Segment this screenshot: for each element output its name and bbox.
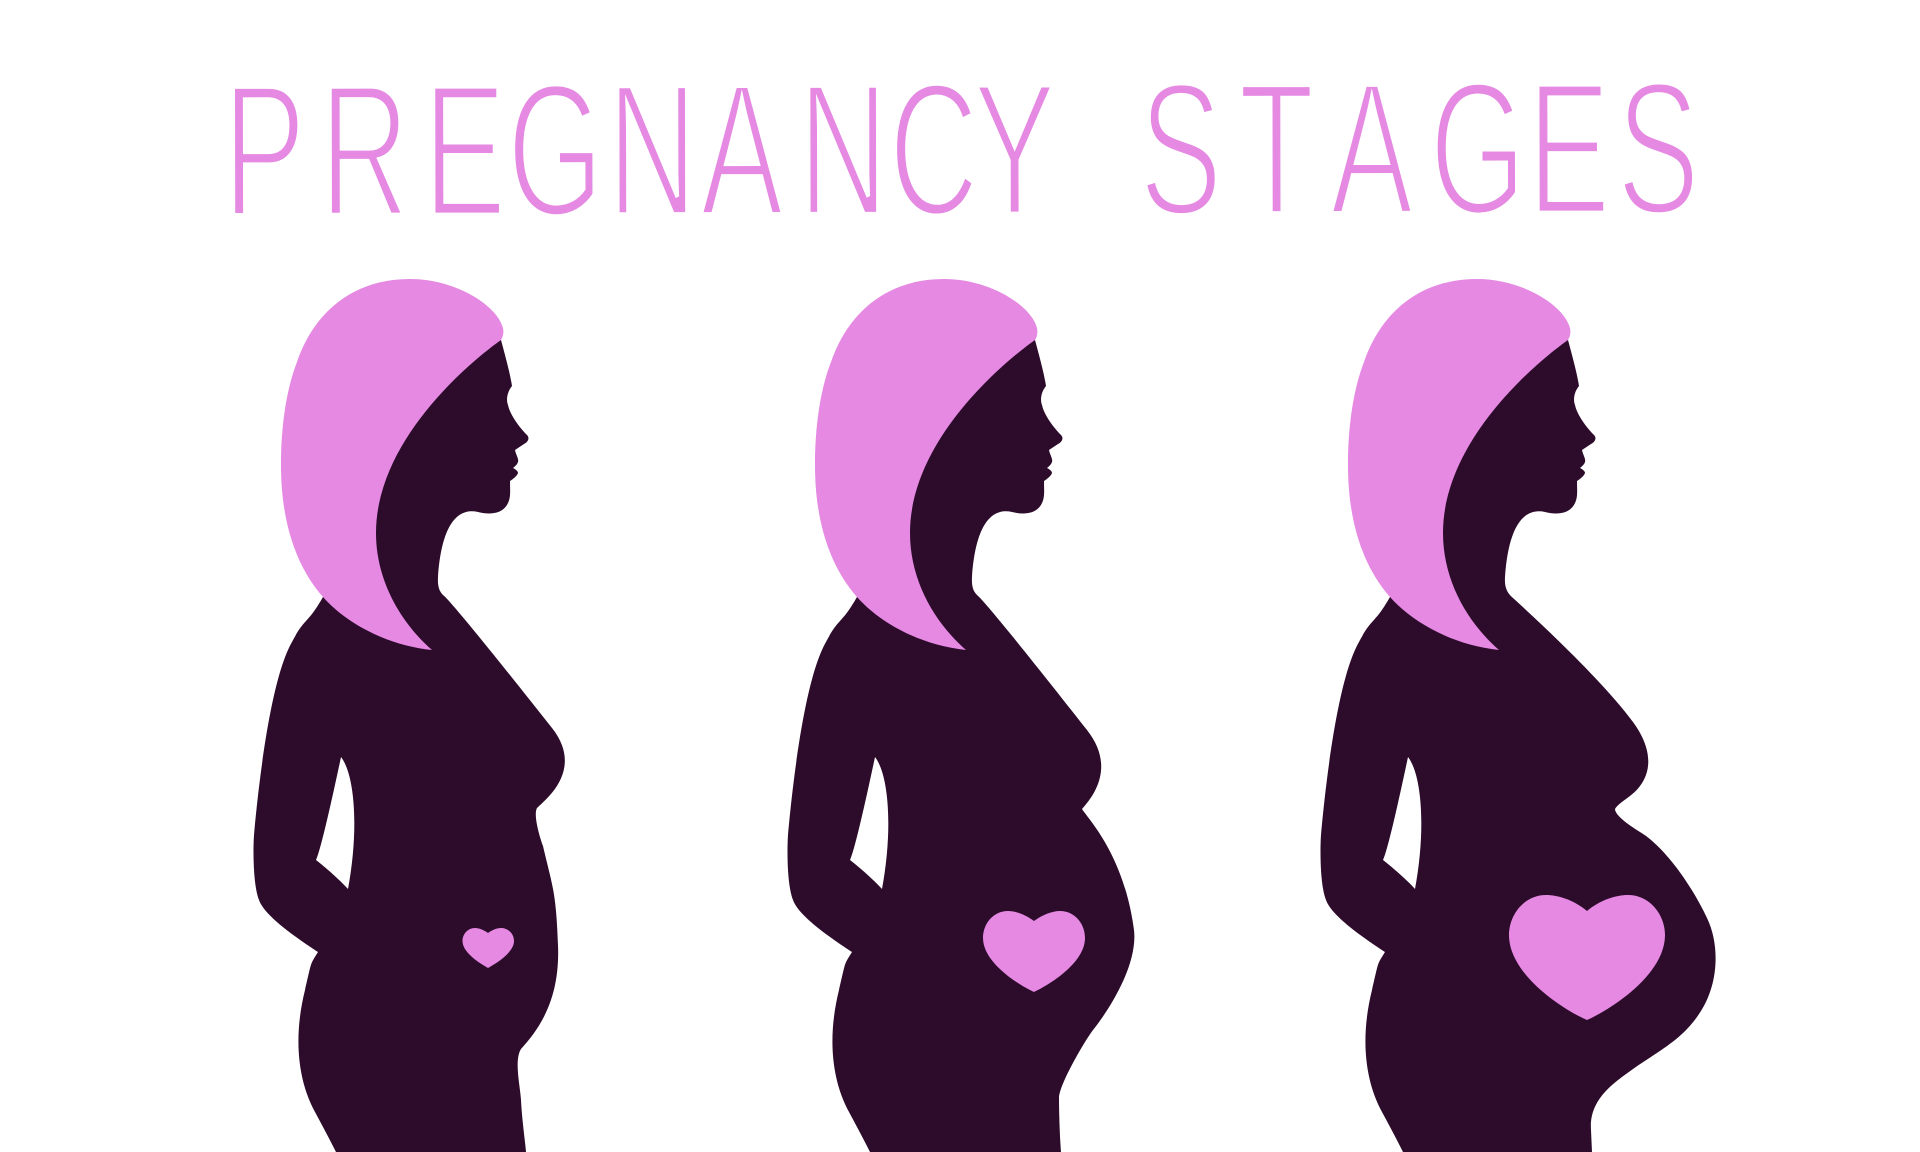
hair <box>281 279 503 650</box>
icon: medium heart <box>983 911 1085 992</box>
body silhouette: late stage <box>1321 330 1716 1152</box>
hair <box>815 279 1037 650</box>
arm gap <box>1383 757 1421 889</box>
figure: late pregnancy <box>1321 279 1716 1152</box>
figure: middle pregnancy <box>788 279 1134 1152</box>
hair <box>1348 279 1570 650</box>
icon: small heart <box>462 928 514 968</box>
arm gap <box>850 757 888 889</box>
body silhouette: middle stage <box>788 330 1134 1152</box>
body silhouette: early stage <box>254 330 565 1152</box>
icon: large heart <box>1509 895 1665 1020</box>
title: Pregnancy Stages: PREGNANCY STAGES <box>223 43 1700 256</box>
figure: early pregnancy <box>254 279 565 1152</box>
arm gap <box>316 757 354 889</box>
